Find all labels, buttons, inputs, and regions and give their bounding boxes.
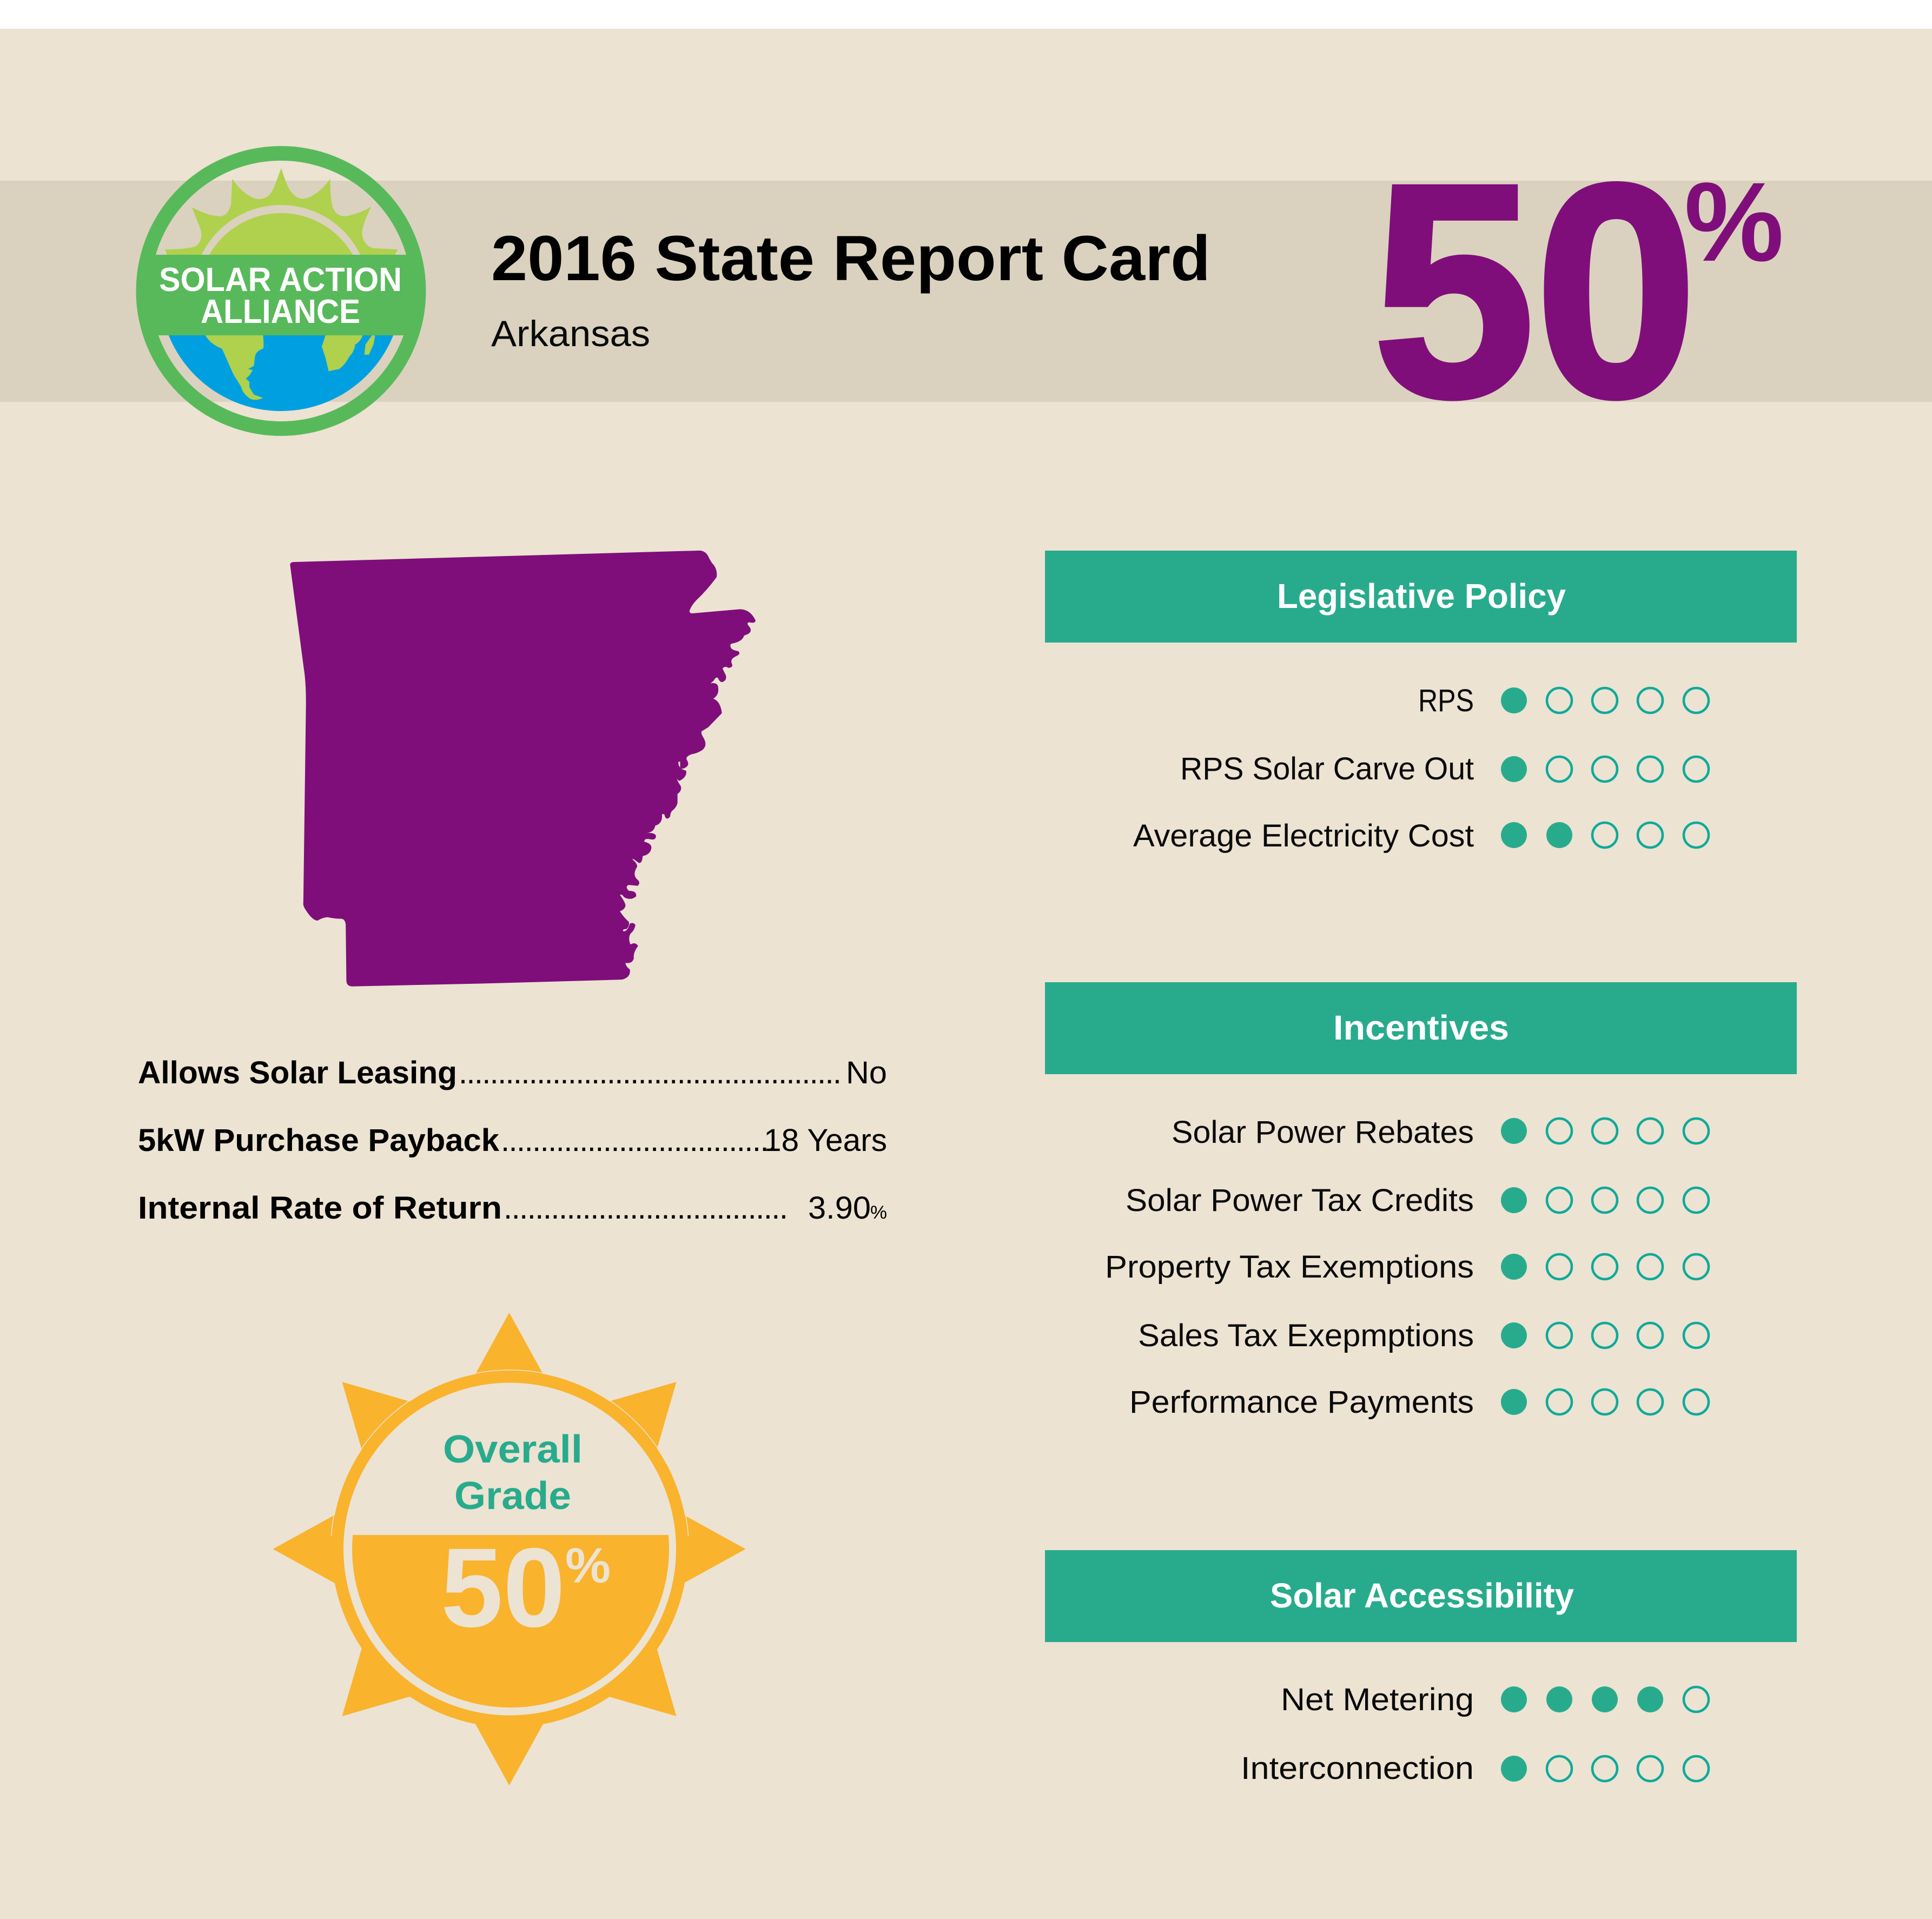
- heading: legislative policy: Legislative Policy: [1277, 577, 1566, 616]
- icon: Solar Action Alliance logo: [130, 154, 433, 434]
- row: solar power rebates: Solar Power Rebates: [1172, 1115, 1474, 1150]
- row: property tax exemptions: Property Tax Exemptions: [1105, 1249, 1474, 1285]
- facts list: [138, 1055, 887, 1226]
- row: sales tax exepmptions: Sales Tax Exepmptions: [1138, 1318, 1474, 1353]
- fact: rate of return: [138, 1190, 887, 1226]
- row: average electricity cost: [1133, 818, 1709, 853]
- heading: solar accessibility: Solar Accessibility: [1270, 1576, 1574, 1615]
- row: interconnection: Interconnection: [1241, 1751, 1474, 1786]
- row: RPS solar carve out: RPS Solar Carve Out: [1180, 751, 1474, 786]
- heading: legislative policy: [1045, 551, 1797, 643]
- fact: rate of return: 3.90: [808, 1190, 871, 1226]
- badge: overall grade sun: [273, 1313, 745, 1785]
- icon: sun rays: [165, 168, 398, 255]
- badge heading: Overall: [443, 1428, 583, 1471]
- row: RPS solar carve out: [1180, 751, 1709, 786]
- header band: [0, 146, 1932, 436]
- icon: sun rays: [273, 1313, 745, 1785]
- row: sales tax exepmptions: [1138, 1318, 1709, 1353]
- badge heading: [443, 1428, 583, 1518]
- heading: solar accessibility: [1045, 1550, 1797, 1642]
- icon: globe: [169, 335, 394, 411]
- fact: purchase payback: 5kW Purchase Payback: [138, 1123, 500, 1158]
- map: Arkansas state outline: [290, 551, 756, 987]
- fact: purchase payback: [138, 1123, 887, 1158]
- fact: solar leasing: No: [846, 1055, 887, 1090]
- row: solar power tax credits: [1126, 1183, 1709, 1218]
- state name: Arkansas: [491, 313, 650, 354]
- headline score: %: [1684, 160, 1784, 285]
- fact: solar leasing: [138, 1055, 887, 1090]
- row: property tax exemptions: [1105, 1249, 1709, 1285]
- heading: incentives: Incentives: [1333, 1008, 1509, 1047]
- panel: solar accessibility: [1045, 1550, 1797, 1786]
- row: solar power tax credits: Solar Power Tax Credits: [1126, 1183, 1474, 1218]
- logo wordmark: ALLIANCE: [201, 293, 360, 330]
- row: net metering: Net Metering: [1281, 1682, 1474, 1717]
- logo wordmark: [159, 261, 402, 330]
- fact: rate of return: %: [870, 1202, 887, 1223]
- row: performance payments: [1129, 1385, 1709, 1420]
- row: solar power rebates: [1172, 1115, 1709, 1150]
- row: RPS: RPS: [1418, 683, 1474, 718]
- badge score: %: [565, 1538, 611, 1593]
- fact: rate of return: Internal Rate of Return: [138, 1190, 502, 1226]
- panel: incentives: [1045, 982, 1797, 1420]
- fact: solar leasing: .................................................: [459, 1055, 842, 1090]
- fact: purchase payback: 18 Years: [764, 1123, 887, 1158]
- row: RPS: [1418, 683, 1709, 718]
- row: performance payments: Performance Payments: [1129, 1385, 1474, 1420]
- row: average electricity cost: Average Electricity Cost: [1133, 818, 1474, 853]
- fact: solar leasing: Allows Solar Leasing: [138, 1055, 457, 1090]
- row: interconnection: [1241, 1751, 1709, 1786]
- fact: purchase payback: ...................................: [501, 1123, 777, 1158]
- logo wordmark: SOLAR ACTION: [159, 261, 402, 299]
- badge heading: Grade: [454, 1474, 571, 1518]
- badge score: 50: [441, 1525, 565, 1651]
- headline score: 50: [1373, 121, 1697, 460]
- row: net metering: [1281, 1682, 1709, 1717]
- fact: rate of return: ....................................: [504, 1190, 788, 1226]
- panel: legislative policy: [1045, 551, 1797, 853]
- title: 2016 State Report Card: [491, 223, 1210, 294]
- heading: incentives: [1045, 982, 1797, 1074]
